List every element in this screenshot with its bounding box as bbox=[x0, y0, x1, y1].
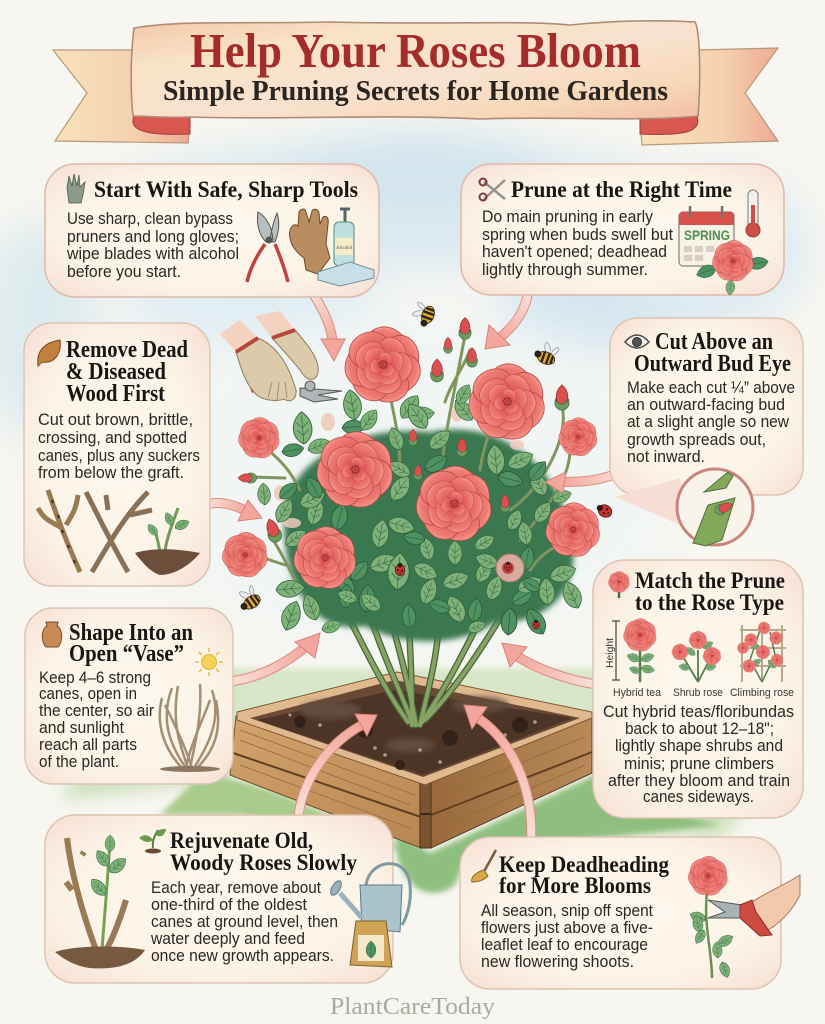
body text: Cut out brown, brittle, bbox=[38, 410, 193, 429]
raised wooden garden bed bbox=[230, 672, 592, 848]
panel: remove dead wood bbox=[24, 323, 210, 586]
icon: ladybug bbox=[594, 501, 614, 520]
body text: canes sideways. bbox=[643, 787, 754, 806]
illustration: shrub rose bbox=[671, 630, 722, 682]
icon: thermometer bbox=[746, 190, 760, 237]
ribbon folds bbox=[133, 116, 698, 134]
rose bush bbox=[221, 318, 604, 725]
roses bbox=[221, 323, 604, 594]
icon: alcohol bottle: Alcohol bbox=[336, 246, 353, 251]
faded petals bbox=[274, 404, 524, 528]
bed rim and soil bbox=[237, 672, 592, 785]
body text: wipe blades with alcohol bbox=[66, 244, 239, 263]
illustration: old canes with new shoot bbox=[55, 835, 145, 968]
body text bbox=[38, 410, 200, 482]
body text: an outward-facing bud bbox=[627, 395, 785, 414]
icon: eye bbox=[625, 335, 649, 348]
heading bbox=[635, 568, 785, 615]
body text: growth spreads out, bbox=[627, 430, 766, 449]
illustration: climbing rose bbox=[737, 621, 786, 682]
watercolor sky wash bbox=[0, 130, 810, 650]
body text: before you start. bbox=[67, 262, 181, 281]
body text: not inward. bbox=[627, 447, 705, 466]
panel: keep deadheading bbox=[460, 837, 800, 989]
type labels bbox=[613, 687, 794, 699]
arrow: bud eye to bush bbox=[545, 470, 625, 493]
icon: terracotta vase bbox=[42, 622, 62, 647]
heading bbox=[499, 852, 669, 898]
ladybugs on leaves bbox=[395, 562, 540, 629]
title: Help Your Roses Bloom bbox=[190, 23, 641, 78]
arrow: rose type to bush bbox=[502, 643, 600, 685]
icon: bypass pruners bbox=[247, 212, 288, 282]
body text bbox=[39, 668, 154, 771]
body text: spring when buds swell but bbox=[482, 225, 673, 244]
panel: open vase bbox=[25, 608, 233, 784]
icon: glove bbox=[67, 174, 85, 203]
body text: at a slight angle so new bbox=[627, 412, 790, 431]
icon: scissors bbox=[480, 178, 505, 200]
height scale bbox=[605, 621, 620, 680]
body text bbox=[481, 901, 653, 971]
body text: reach all parts bbox=[39, 735, 137, 754]
body text: All season, snip off spent bbox=[481, 901, 653, 920]
callout wedge bbox=[615, 478, 692, 530]
body text: water deeply and feed bbox=[150, 929, 305, 948]
body text: canes, plus any suckers bbox=[38, 446, 200, 465]
heading: Open “Vase” bbox=[69, 641, 184, 667]
hand with pruner bbox=[708, 875, 800, 936]
illustration: vase-shaped canes bbox=[160, 684, 220, 772]
body text: minis; prune climbers bbox=[624, 754, 774, 773]
illustration: hybrid tea bbox=[622, 617, 659, 682]
body text: canes, open in bbox=[39, 684, 137, 703]
icon: spring calendar bbox=[679, 206, 734, 266]
leaves bbox=[257, 382, 586, 638]
panel: right time bbox=[461, 164, 784, 296]
left ribbon tail bbox=[53, 50, 190, 143]
body text: crossing, and spotted bbox=[38, 428, 187, 447]
body text: new flowering shoots. bbox=[481, 952, 634, 971]
icon: autumn leaf bbox=[38, 340, 60, 366]
heading: Shape Into an bbox=[69, 620, 193, 646]
body text: haven't opened; deadhead bbox=[482, 242, 667, 261]
body text: flowers just above a five- bbox=[481, 918, 653, 937]
heading: Start With Safe, Sharp Tools bbox=[94, 177, 358, 202]
panel: rejuvenate bbox=[45, 815, 410, 983]
body text: canes at ground level, then bbox=[151, 912, 338, 931]
body text bbox=[482, 207, 673, 279]
heading: Keep Deadheading bbox=[499, 852, 669, 877]
left side planks bbox=[230, 716, 421, 848]
type labels: Climbing rose bbox=[730, 687, 794, 699]
body text: back to about 12–18"; bbox=[625, 719, 774, 738]
icon: rose bbox=[608, 570, 631, 598]
body text bbox=[603, 702, 794, 806]
panel: outward bud eye bbox=[610, 318, 803, 546]
watermark: PlantCareToday bbox=[330, 994, 495, 1020]
callout: bud cut detail bbox=[677, 469, 753, 546]
heading: Prune at the Right Time bbox=[511, 177, 732, 202]
heading: for More Blooms bbox=[499, 873, 651, 898]
icon: towel bbox=[318, 262, 374, 286]
body text bbox=[66, 209, 239, 281]
body text: Do main pruning in early bbox=[482, 207, 653, 226]
illustration: diseased cane bbox=[38, 490, 80, 572]
heading: to the Rose Type bbox=[635, 590, 784, 615]
heading bbox=[170, 828, 357, 875]
body text: leaflet leaf to encourage bbox=[481, 935, 648, 954]
body text: and sunlight bbox=[39, 718, 124, 737]
body text: of the plant. bbox=[39, 752, 119, 771]
banner body bbox=[131, 21, 700, 119]
arrow: timing to bush bbox=[485, 292, 528, 349]
heading: Rejuvenate Old, bbox=[170, 828, 313, 853]
heading: Wood First bbox=[66, 381, 165, 407]
body text bbox=[627, 378, 795, 466]
illustration: sucker below graft bbox=[135, 508, 200, 575]
right ribbon tail bbox=[640, 48, 778, 145]
body text: Each year, remove about bbox=[151, 878, 321, 897]
upper canes bbox=[250, 335, 570, 590]
icon: garden brush bbox=[472, 850, 496, 882]
icon: gloves bbox=[290, 209, 330, 274]
icon: seedling bbox=[139, 829, 166, 854]
icon: fertilizer bag bbox=[350, 921, 392, 967]
grass background bbox=[60, 668, 763, 893]
illustration: rose stem with pruner bbox=[687, 854, 800, 979]
icon: spring calendar: SPRING bbox=[684, 227, 730, 243]
icon: alcohol bottle bbox=[334, 209, 354, 266]
body text: lightly through summer. bbox=[482, 260, 648, 279]
faded rose with ladybug bbox=[496, 554, 524, 582]
body text: one-third of the oldest bbox=[151, 895, 307, 914]
body text: Cut hybrid teas/floribundas bbox=[603, 702, 794, 721]
icon: watering can bbox=[329, 864, 410, 932]
icon: bee top bbox=[410, 301, 437, 329]
subtitle: Simple Pruning Secrets for Home Gardens bbox=[163, 76, 668, 107]
body text: from below the graft. bbox=[38, 463, 184, 482]
icon: rose bbox=[695, 238, 769, 296]
body text: the center, so air bbox=[39, 701, 154, 720]
foliage mass bbox=[284, 430, 574, 641]
arrow: rejuvenate to bush bbox=[298, 714, 377, 822]
heading: Outward Bud Eye bbox=[634, 351, 791, 377]
illustration: crossing canes bbox=[86, 492, 152, 572]
arrow: dead wood to bush bbox=[205, 500, 262, 521]
body text: Use sharp, clean bypass bbox=[67, 209, 233, 228]
panel: rose type bbox=[593, 560, 803, 818]
body text: lightly shape shrubs and bbox=[615, 736, 783, 755]
type labels: Shrub rose bbox=[673, 687, 723, 699]
body text: Make each cut ¼” above bbox=[627, 378, 795, 397]
stems bbox=[340, 600, 505, 725]
heading: Cut Above an bbox=[655, 329, 773, 355]
body text: once new growth appears. bbox=[151, 946, 334, 965]
heading bbox=[66, 337, 189, 407]
heading: Match the Prune bbox=[635, 568, 785, 593]
heading bbox=[634, 329, 791, 377]
heading bbox=[69, 620, 193, 667]
buds bbox=[238, 318, 569, 544]
icon: bee right bbox=[532, 340, 560, 367]
arrow: deadheading to bush bbox=[464, 705, 531, 842]
gloved hands with pruners bbox=[220, 311, 342, 402]
type labels: Hybrid tea bbox=[613, 687, 662, 699]
heading: Remove Dead bbox=[66, 337, 189, 363]
body text: after they bloom and train bbox=[608, 771, 790, 790]
arrow: tools to bush bbox=[312, 292, 345, 361]
body text: pruners and long gloves; bbox=[67, 227, 239, 246]
body text bbox=[150, 878, 338, 965]
panel: safe sharp tools bbox=[45, 164, 379, 297]
right side planks bbox=[431, 716, 592, 848]
body text: Keep 4–6 strong bbox=[39, 668, 151, 687]
icon: bee lower left bbox=[233, 585, 263, 614]
height scale: Height bbox=[605, 638, 616, 668]
heading: Woody Roses Slowly bbox=[170, 850, 357, 875]
arrow: vase to bush bbox=[228, 633, 320, 682]
icon: sun bbox=[195, 648, 223, 676]
title banner bbox=[53, 21, 778, 145]
heading: & Diseased bbox=[66, 359, 167, 385]
